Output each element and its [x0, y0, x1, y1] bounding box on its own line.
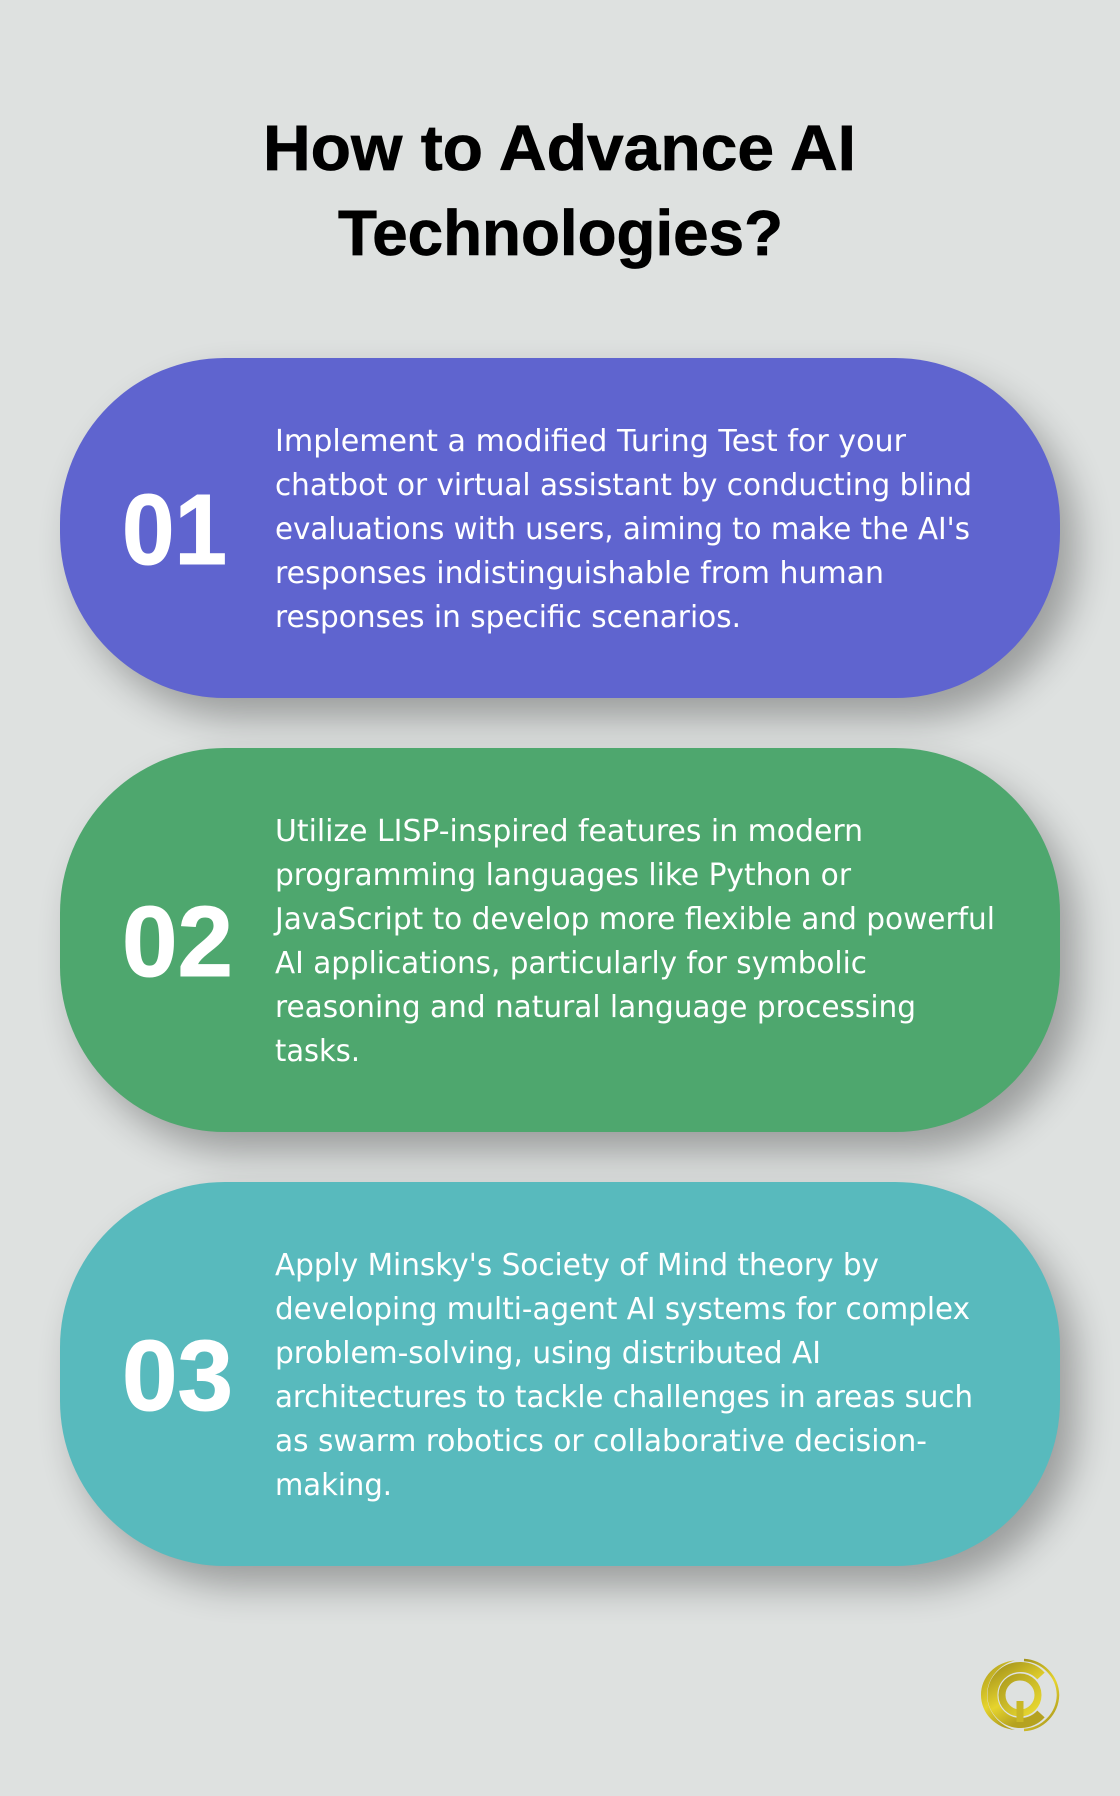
step number 03: 03 — [122, 1320, 233, 1432]
panel: step 03 — [60, 1182, 1076, 1586]
step 03 text: making. — [275, 1468, 392, 1503]
step 02 text: programming languages like Python or — [275, 858, 851, 893]
step 02 text — [273, 814, 995, 1069]
step 02 text: reasoning and natural language processing — [275, 990, 916, 1025]
title — [263, 112, 856, 269]
panel: step 01 — [60, 358, 1076, 718]
step 01 text: Implement a modified Turing Test for your — [275, 424, 906, 459]
step 02 text: Utilize LISP-inspired features in modern — [275, 814, 863, 849]
step 01 text: responses in specific scenarios. — [275, 600, 741, 635]
step 01 text: evaluations with users, aiming to make the AI's — [275, 512, 970, 547]
step 03 text — [275, 1248, 973, 1503]
step 02 text: tasks. — [275, 1034, 360, 1069]
step 03 text: problem-solving, using distributed AI — [275, 1336, 821, 1371]
step 03 text: architectures to tackle challenges in areas such — [275, 1380, 973, 1415]
step 02 text: AI applications, particularly for symbolic — [275, 946, 867, 981]
step number 01: 01 — [122, 474, 227, 586]
step 02 text: JavaScript to develop more flexible and powerful — [273, 902, 995, 937]
panel: step 02 — [60, 748, 1076, 1152]
icon: gold logo — [981, 1660, 1058, 1730]
step 01 text: responses indistinguishable from human — [275, 556, 884, 591]
title: How to Advance AI — [263, 112, 856, 184]
step 01 text — [275, 424, 972, 635]
step 01 text: chatbot or virtual assistant by conducting blind — [275, 468, 972, 503]
step 03 text: as swarm robotics or collaborative decision- — [275, 1424, 927, 1459]
title: Technologies? — [338, 197, 783, 269]
step 03 text: Apply Minsky's Society of Mind theory by — [275, 1248, 879, 1283]
step number 02: 02 — [122, 886, 233, 998]
step 03 text: developing multi-agent AI systems for complex — [275, 1292, 970, 1327]
